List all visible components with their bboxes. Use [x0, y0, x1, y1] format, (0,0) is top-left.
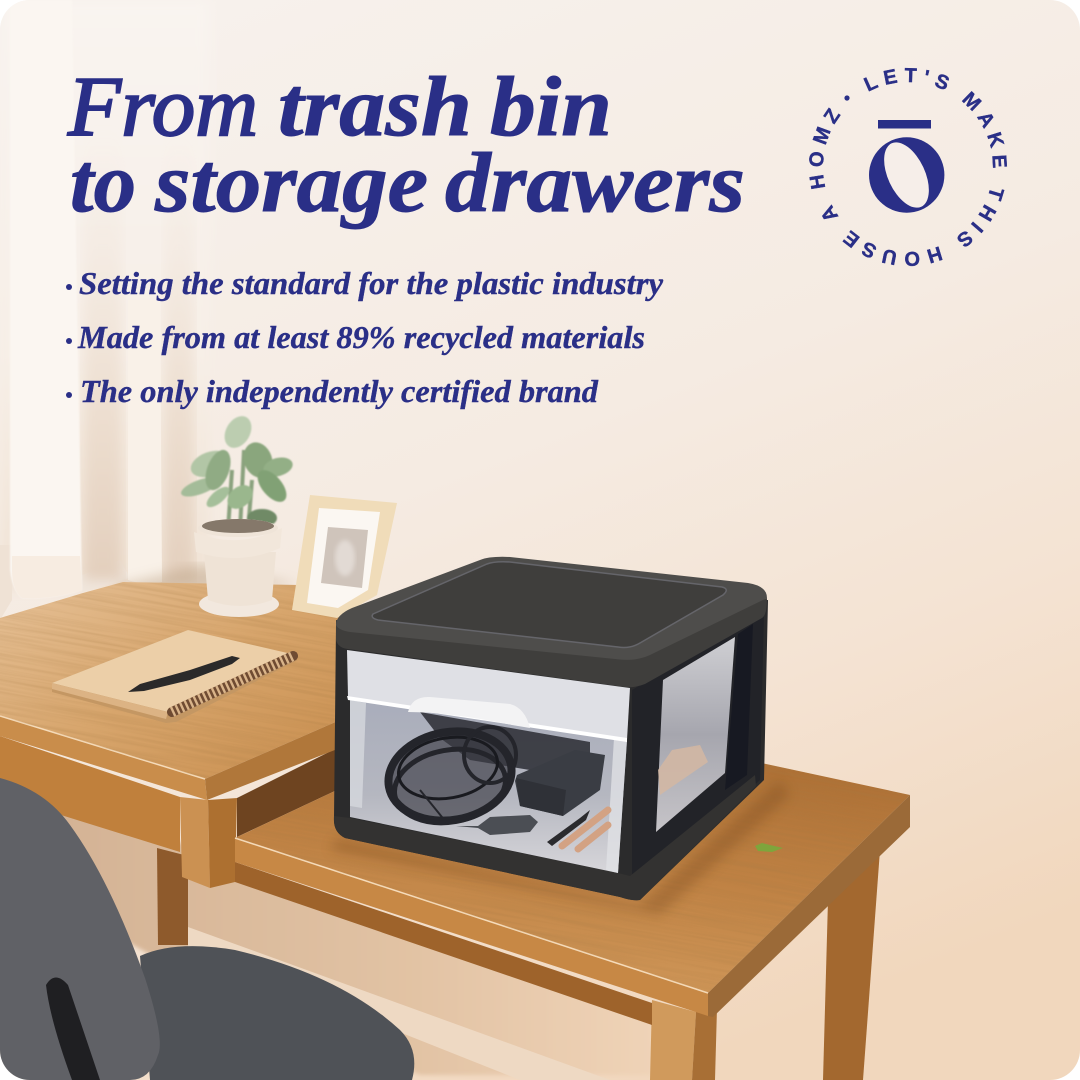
circular logo badge: LET'S MAKE THIS HOUSE A HOMZ	[809, 68, 1008, 266]
bullet list: The only independently certified brand	[80, 373, 599, 409]
base band	[334, 775, 756, 900]
notebook	[52, 630, 298, 723]
rear right leg	[823, 850, 880, 1080]
front face	[235, 838, 708, 1016]
plant pot	[194, 519, 282, 617]
lid inset	[372, 562, 726, 648]
storage drawer unit	[334, 557, 768, 900]
headline: From	[67, 60, 258, 154]
bullet list: Made from at least 89% recycled materials	[77, 319, 645, 355]
jack plug	[456, 815, 538, 835]
lid front lip	[336, 598, 767, 687]
headline	[67, 60, 745, 230]
headline: drawers	[445, 136, 745, 230]
bullet list	[66, 265, 664, 409]
leaf on desk	[755, 843, 783, 852]
front desk	[235, 762, 910, 1080]
plant	[179, 411, 295, 530]
headline: bin	[490, 60, 612, 154]
top	[235, 762, 910, 993]
charger	[515, 750, 605, 816]
bullet list: Setting the standard for the plastic industry	[79, 265, 664, 301]
armrest	[46, 978, 100, 1080]
baseboard	[188, 927, 610, 1080]
apron	[235, 862, 652, 1025]
picture frame	[292, 495, 397, 618]
shadow behind plant on sill	[120, 565, 300, 600]
cable coil	[381, 712, 590, 831]
headline: to	[70, 136, 136, 230]
lid top	[336, 557, 767, 660]
wall shadow under desks	[60, 800, 652, 1075]
headline: trash	[278, 60, 472, 154]
shadow under drawer unit	[330, 780, 790, 915]
wood grain overlay	[0, 583, 708, 993]
chair	[0, 778, 414, 1080]
drawer window	[350, 700, 627, 873]
drawer handle	[408, 697, 530, 728]
curtain	[0, 0, 210, 620]
front leg	[650, 1000, 696, 1080]
drawer top strip	[347, 650, 630, 740]
back desk front leg	[180, 797, 210, 888]
headline: storage	[154, 136, 428, 230]
right face	[708, 795, 910, 1017]
copper pens	[562, 810, 608, 849]
side window	[656, 637, 735, 832]
back desk	[0, 582, 340, 945]
